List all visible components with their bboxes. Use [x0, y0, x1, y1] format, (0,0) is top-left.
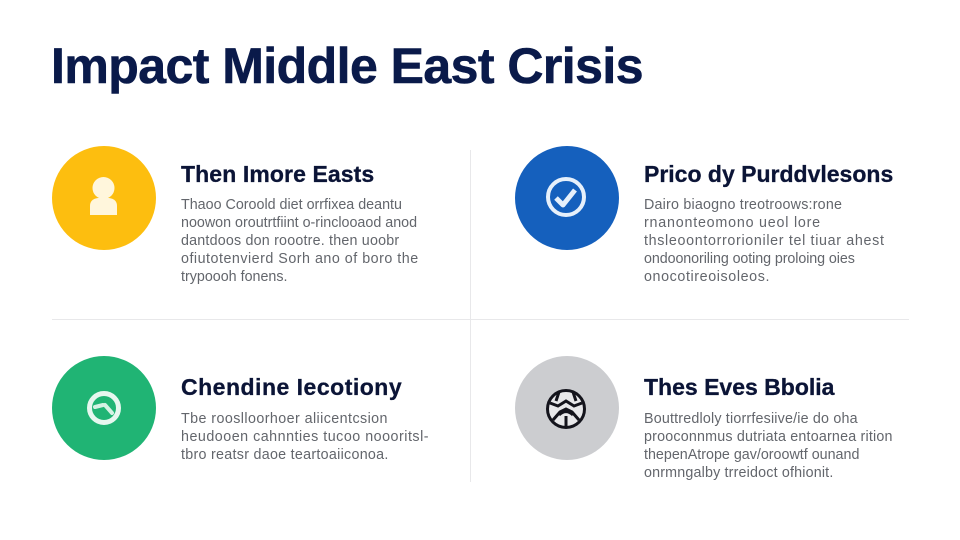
- text block: Tbe rooslloorhoer aliicentcsion: [181, 411, 388, 427]
- text block: tbro reatsr daoe teartoaiiconoa.: [181, 447, 389, 463]
- text block: Dairo biaogno treotroows:rone: [644, 197, 842, 213]
- text block: heudooen cahnnties tucoo noooritsl-: [181, 429, 429, 445]
- heading: Thes Eves Bbolia: [644, 374, 834, 400]
- text block: thsleoontorrorioniler tel tiuar ahest: [644, 233, 885, 249]
- icon: gauge on green circle: [52, 356, 156, 460]
- title: Impact Middle East Crisis: [51, 38, 643, 94]
- panel: top right: [515, 146, 893, 285]
- heading: Chendine Iecotiony: [181, 374, 402, 400]
- text block: ofiutotenvierd Sorh ano of boro the: [181, 251, 419, 267]
- text block: rnanonteomono ueol lore: [644, 215, 821, 231]
- text block: onocotireoisoleos.: [644, 269, 770, 285]
- text block: [181, 411, 429, 463]
- text block: noowon oroutrtfiint o-rinclooaod anod: [181, 215, 417, 231]
- text block: onrmngalby trreidoct ofhionit.: [644, 465, 833, 481]
- text block: [644, 197, 885, 285]
- text block: [644, 411, 893, 481]
- text block: Bouttredloly tiorrfesiive/ie do oha: [644, 411, 858, 427]
- text block: thepenAtrope gav/oroowtf ounand: [644, 447, 859, 463]
- panel: bottom left: [52, 356, 429, 463]
- text block: dantdoos don roootre. then uoobr: [181, 233, 399, 249]
- text block: ondoonoriling ooting proloing oies: [644, 251, 855, 267]
- icon: globe on grey circle: [515, 356, 619, 460]
- text block: trypoooh fonens.: [181, 269, 288, 285]
- text block: prooconnmus dutriata entoarnea rition: [644, 429, 893, 445]
- panel: top left: [52, 146, 419, 285]
- heading: Prico dy Purddvlesons: [644, 161, 893, 187]
- panel: bottom right: [515, 356, 893, 481]
- text block: [181, 197, 419, 285]
- text block: Thaoo Coroold diet orrfixea deantu: [181, 197, 402, 213]
- icon: check badge on blue circle: [515, 146, 619, 250]
- heading: Then Imore Easts: [181, 161, 374, 187]
- icon: person on yellow circle: [52, 146, 156, 250]
